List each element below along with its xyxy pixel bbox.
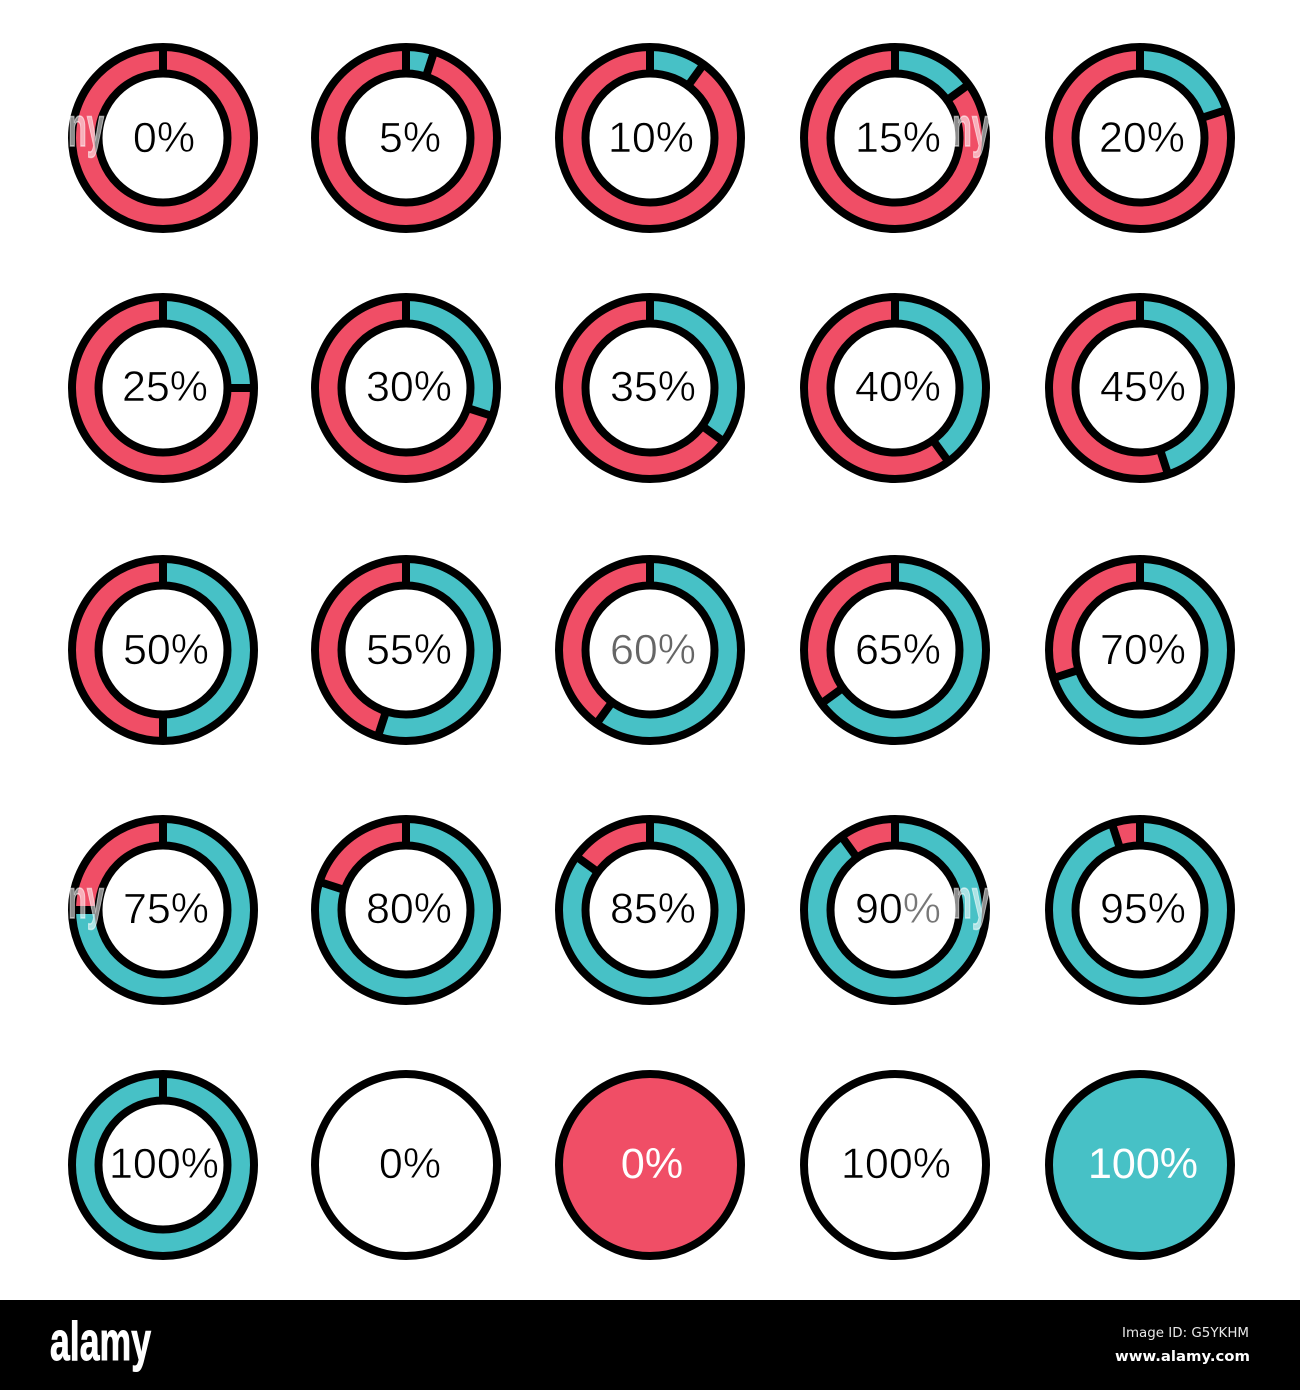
ring: 40% xyxy=(804,297,986,479)
ring: 10%: 10% xyxy=(608,114,694,162)
watermark fragment: lower left: ny xyxy=(68,867,104,930)
image id: Image ID: G5YKHM xyxy=(1122,1326,1249,1341)
ring: 55% xyxy=(315,559,497,741)
circle: solid red 0%: 0% xyxy=(621,1140,683,1188)
ring: 15%: 15% xyxy=(855,114,941,162)
ring: 0% xyxy=(72,47,254,229)
ring: 25% xyxy=(72,297,254,479)
ring: 50%: 50% xyxy=(123,626,209,674)
watermark fragment: lower right: ny xyxy=(952,867,990,930)
ring: 45% xyxy=(1049,297,1231,479)
ring: 85%: 85% xyxy=(610,885,696,933)
watermark fragment: top left: ny xyxy=(68,95,104,158)
ring: 75%: 75% xyxy=(123,885,209,933)
website: www.alamy.com xyxy=(1115,1349,1250,1365)
ring: 15% xyxy=(804,47,986,229)
circle: empty 100%: 100% xyxy=(841,1140,951,1188)
ring: 35% xyxy=(559,297,741,479)
ring: 25%: 25% xyxy=(122,363,208,411)
ring: 10% xyxy=(559,47,741,229)
circle: solid red 0% xyxy=(559,1074,741,1256)
circle: empty 0% xyxy=(315,1074,497,1256)
ring: 50% xyxy=(72,559,254,741)
ring: 90% xyxy=(804,819,986,1001)
ring: 95%: 95% xyxy=(1100,885,1186,933)
circle: empty 100% xyxy=(804,1074,986,1256)
ring: 20% xyxy=(1049,47,1231,229)
ring: 90%: 90% xyxy=(855,885,941,933)
ring: 100%: 100% xyxy=(109,1140,219,1188)
watermark fragment: top right: ny xyxy=(952,95,990,158)
ring: 40%: 40% xyxy=(855,363,941,411)
ring: 0%: 0% xyxy=(133,114,195,162)
ring: 65% xyxy=(804,559,986,741)
ring: 85% xyxy=(559,819,741,1001)
ring: 20%: 20% xyxy=(1099,114,1185,162)
footer bar xyxy=(0,1300,1300,1390)
ring: 65%: 65% xyxy=(855,626,941,674)
circle: empty 0%: 0% xyxy=(379,1140,441,1188)
ring: 70%: 70% xyxy=(1100,626,1186,674)
ring: 100% xyxy=(72,1074,254,1256)
ring: 60% xyxy=(559,559,741,741)
ring: 45%: 45% xyxy=(1100,363,1186,411)
ring: 30% xyxy=(315,297,497,479)
ring: 80%: 80% xyxy=(366,885,452,933)
ring: 30%: 30% xyxy=(366,363,452,411)
circle: solid teal 100% xyxy=(1049,1074,1231,1256)
ring: 95% xyxy=(1049,819,1231,1001)
ring: 75% xyxy=(72,819,254,1001)
ring: 5%: 5% xyxy=(379,114,441,162)
alamy logo: alamy xyxy=(50,1310,151,1372)
ring: 60%: 60% xyxy=(610,626,696,674)
ring: 80% xyxy=(315,819,497,1001)
ring: 55%: 55% xyxy=(366,626,452,674)
ring: 35%: 35% xyxy=(610,363,696,411)
ring: 5% xyxy=(315,47,497,229)
ring: 70% xyxy=(1049,559,1231,741)
circle: solid teal 100%: 100% xyxy=(1088,1140,1198,1188)
